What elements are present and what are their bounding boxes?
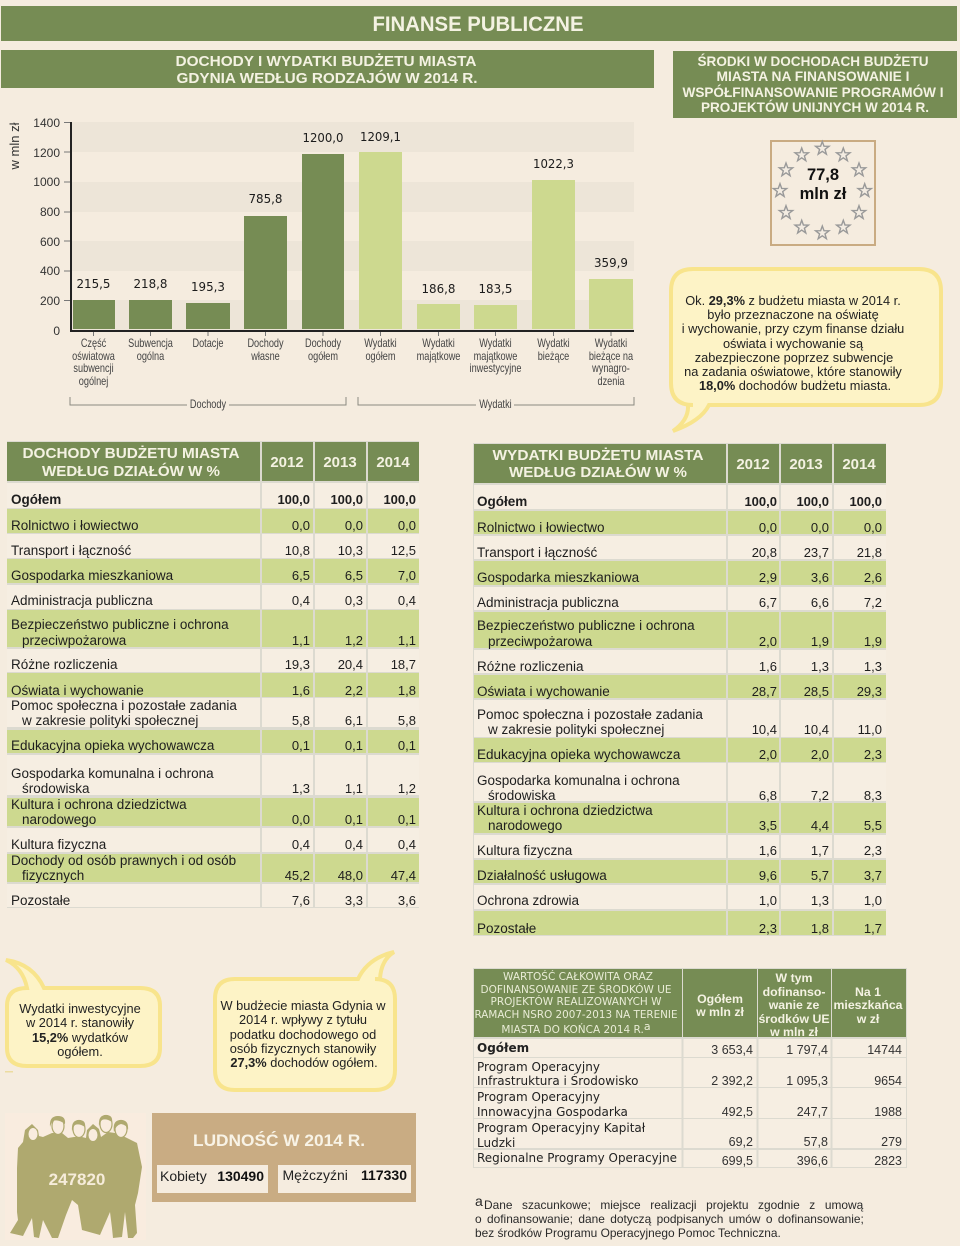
table values: 5,8 [292, 713, 310, 728]
table values: 23,7 [804, 545, 829, 560]
table labels [477, 494, 703, 936]
table labels: Program Operacyjny Kapitał [477, 1121, 646, 1135]
category labels: Subwencja [128, 338, 173, 350]
table labels: Bezpieczeństwo publiczne i ochrona [477, 618, 695, 633]
table header: W tym [776, 971, 813, 985]
table labels: Administracja publiczna [11, 593, 153, 608]
table header: mieszkańca [833, 998, 903, 1012]
table values [711, 1043, 902, 1168]
y axis labels: 800 [40, 205, 60, 219]
panel: population: LUDNOŚĆ W 2014 R. [193, 1131, 365, 1150]
category labels: Dochody [190, 399, 227, 411]
category labels: Wydatki [595, 338, 627, 350]
table values: 21,8 [857, 545, 882, 560]
table labels: przeciwpożarowa [22, 633, 127, 648]
table values: 6,6 [811, 595, 829, 610]
category labels: Wydatki [364, 338, 397, 350]
value labels: 359,9 [594, 255, 628, 270]
footnote: bez środków Programu Operacyjnego Pomoc Techniczna. [475, 1226, 781, 1240]
table labels: Kultura i ochrona dziedzictwa [477, 803, 653, 818]
table header: RAMACH NSRO 2007-2013 NA TERENIE [474, 1009, 678, 1021]
table values: 3,6 [811, 570, 829, 585]
category labels: Część [81, 338, 106, 350]
category labels: bieżące [538, 351, 569, 363]
table values: 6,8 [759, 788, 777, 803]
panel: population [152, 1113, 416, 1202]
value labels: 195,3 [191, 279, 225, 294]
callout: personal income tax: 27,3% dochodów ogółem. [230, 1055, 378, 1070]
table labels: Administracja publiczna [477, 595, 619, 610]
table values: 1,3 [864, 659, 882, 674]
table values: 1,6 [759, 843, 777, 858]
table values: 3,7 [864, 868, 882, 883]
table values: 100,0 [383, 492, 416, 507]
callout: personal income tax: osób fizycznych stanowiły [230, 1041, 377, 1056]
table values: 2,3 [864, 843, 882, 858]
table values: 10,8 [285, 543, 310, 558]
table values: 0,0 [292, 812, 310, 827]
footnote [475, 1193, 864, 1240]
table labels: Ogółem [11, 492, 61, 507]
table values: 0,0 [759, 520, 777, 535]
category labels: Wydatki [537, 338, 570, 350]
table values: 2 392,2 [711, 1074, 753, 1088]
bar chart: income and expenses [7, 116, 634, 411]
callout: education share [671, 269, 941, 431]
heading: budget income and expenses: GDYNIA WEDŁUG RODZAJÓW W 2014 R. [176, 69, 478, 87]
table values: 279 [881, 1135, 902, 1149]
table labels: Transport i łączność [477, 545, 598, 560]
men count [278, 1165, 411, 1193]
callout: investment expenses: w 2014 r. stanowiły [25, 1015, 135, 1030]
footnote: Dane szacunkowe; miejsce realizacji projektu zgodnie z umową [484, 1198, 864, 1212]
table header: w zł [856, 1012, 880, 1026]
value labels: 215,5 [76, 276, 110, 291]
table values: 69,2 [729, 1135, 753, 1149]
table header: wanie ze [768, 998, 819, 1012]
table header [474, 969, 906, 1039]
table values: 7,2 [864, 595, 882, 610]
heading: EU programmes: ŚRODKI W DOCHODACH BUDŻETU [698, 52, 928, 69]
table values: 10,3 [338, 543, 363, 558]
table header: 2012 [736, 456, 770, 473]
table values: 7,0 [398, 568, 416, 583]
men count: 117330 [361, 1167, 407, 1183]
table values: 10,4 [804, 722, 829, 737]
table values: 1,2 [398, 781, 416, 796]
table values: 11,0 [858, 722, 882, 737]
table header [7, 442, 419, 481]
table values: 9,6 [759, 868, 777, 883]
table values: 3,3 [345, 893, 363, 908]
table header: PROJEKTÓW REALIZOWANYCH W [490, 995, 662, 1008]
table values [277, 492, 416, 908]
table values: 0,0 [864, 520, 882, 535]
value labels: 1200,0 [302, 130, 344, 145]
table values: 1 095,3 [786, 1074, 828, 1088]
category labels: Wydatki [422, 338, 455, 350]
value labels [76, 129, 628, 296]
table values: 0,4 [398, 593, 416, 608]
table values: 396,6 [797, 1154, 828, 1168]
table header: Na 1 [855, 985, 881, 999]
light bars: expenses [359, 152, 633, 329]
table values: 1,8 [398, 683, 416, 698]
table values: 2,0 [759, 634, 777, 649]
table labels: Kultura i ochrona dziedzictwa [11, 797, 187, 812]
table values: 1 797,4 [786, 1043, 828, 1057]
table header: dofinanso- [763, 985, 825, 999]
table values: 1,9 [864, 634, 882, 649]
y axis labels: 1200 [33, 146, 60, 160]
table header [474, 444, 886, 483]
heading: EU programmes: MIASTA NA FINANSOWANIE I [716, 68, 910, 84]
table header: Ogółem [697, 992, 743, 1006]
table labels: środowiska [488, 788, 556, 803]
category labels: Dochody [247, 338, 284, 350]
table header: w mln zł [695, 1005, 744, 1019]
table values: 2,2 [345, 683, 363, 698]
table values: 2,0 [759, 747, 777, 762]
table labels: fizycznych [22, 868, 84, 883]
table labels: Gospodarka mieszkaniowa [11, 568, 174, 583]
value labels: 1022,3 [533, 156, 574, 171]
table values: 1,1 [398, 633, 416, 648]
table values: 6,5 [345, 568, 363, 583]
table labels: Ochrona zdrowia [477, 893, 580, 908]
table labels: Bezpieczeństwo publiczne i ochrona [11, 617, 229, 632]
table values: 100,0 [744, 494, 777, 509]
category labels: majątkowe [417, 351, 461, 363]
table values: 29,3 [857, 684, 882, 699]
category labels: majątkowe [474, 351, 518, 363]
table header: DOFINANSOWANIE ZE ŚRODKÓW UE [480, 983, 672, 996]
table labels: Kultura fizyczna [11, 837, 107, 852]
table values: 1,3 [811, 659, 829, 674]
category labels: dzenia [598, 376, 625, 388]
table values: 1988 [874, 1105, 902, 1119]
table header: 2013 [789, 456, 823, 473]
callout: investment expenses: ogółem. [57, 1044, 103, 1059]
EU stars box: 77,8 mln zł: mln zł [800, 185, 847, 203]
category labels: Wydatki [479, 399, 512, 411]
table labels: Różne rozliczenia [11, 657, 118, 672]
table values: 2,6 [864, 570, 882, 585]
table values: 9654 [874, 1074, 902, 1088]
table labels: Program Operacyjny [477, 1090, 600, 1104]
table values: 0,0 [345, 518, 363, 533]
table labels: narodowego [488, 818, 562, 833]
table header: MIASTA DO KOŃCA 2014 R. [501, 1024, 644, 1036]
table values: 0,1 [398, 738, 416, 753]
table values: 5,7 [811, 868, 829, 883]
table labels: Różne rozliczenia [477, 659, 584, 674]
y axis labels [33, 116, 60, 338]
table values: 18,7 [391, 657, 416, 672]
table values: 1,6 [292, 683, 310, 698]
y axis labels: 0 [53, 324, 60, 338]
table labels: środowiska [22, 781, 90, 796]
table values: 2,0 [811, 747, 829, 762]
table values: 19,3 [285, 657, 310, 672]
table labels: Gospodarka komunalna i ochrona [477, 773, 680, 788]
table labels: Ludzki [477, 1136, 515, 1150]
table values: 3,6 [398, 893, 416, 908]
y axis labels: 1000 [33, 175, 60, 189]
table values: 45,2 [285, 868, 310, 883]
table values: 0,0 [398, 518, 416, 533]
callout: personal income tax: podatku dochodowego od [230, 1027, 376, 1042]
table values: 0,4 [292, 593, 310, 608]
table labels: Pozostałe [11, 893, 70, 908]
table values: 1,8 [811, 921, 829, 936]
table values: 1,1 [292, 633, 310, 648]
value labels: 218,8 [134, 276, 168, 291]
table values: 5,8 [398, 713, 416, 728]
category labels: ogółem [308, 351, 338, 363]
table labels: Gospodarka mieszkaniowa [477, 570, 640, 585]
table: budget income by sector [7, 441, 419, 908]
table labels: Pomoc społeczna i pozostałe zadania [11, 698, 237, 713]
table labels: Rolnictwo i łowiectwo [11, 518, 139, 533]
category labels: inwestycyjne [470, 363, 522, 375]
table values: 1,3 [811, 893, 829, 908]
title banner: FINANSE PUBLICZNE [372, 13, 584, 36]
table values: 1,9 [811, 634, 829, 649]
title banner [1, 6, 957, 41]
value labels: 785,8 [248, 191, 283, 206]
table values: 7,6 [292, 893, 310, 908]
table labels: w zakresie polityki społecznej [487, 722, 664, 737]
table values: 7,2 [811, 788, 829, 803]
table values: 0,1 [345, 812, 363, 827]
table labels: Dochody od osób prawnych i od osób [11, 853, 236, 868]
category labels: ogółem [365, 351, 395, 363]
heading: budget income and expenses [1, 50, 654, 88]
table labels: Regionalne Programy Operacyjne [477, 1151, 677, 1165]
table values: 1,0 [864, 893, 882, 908]
table header: WARTOŚĆ CAŁKOWITA ORAZ [503, 970, 653, 983]
table values: 0,1 [398, 812, 416, 827]
category labels: oświatowa [72, 351, 115, 363]
heading: EU programmes: WSPÓŁFINANSOWANIE PROGRAMÓW I [682, 83, 944, 100]
table values: 100,0 [796, 494, 829, 509]
table values: 28,5 [804, 684, 829, 699]
table values: 0,1 [292, 738, 310, 753]
callout: education share: zabezpieczone poprzez subwencje [695, 350, 893, 365]
table values: 699,5 [722, 1154, 753, 1168]
table values: 4,4 [811, 818, 829, 833]
table values: 100,0 [330, 492, 363, 507]
table values: 1,7 [864, 921, 882, 936]
table values: 0,0 [292, 518, 310, 533]
table labels: Gospodarka komunalna i ochrona [11, 766, 214, 781]
callout: education share: na zadania oświatowe, które stanowiły [684, 364, 902, 379]
table values: 0,0 [811, 520, 829, 535]
EU stars box: 77,8 mln zł: 77,8 [807, 166, 839, 184]
dark bars: income [73, 154, 344, 329]
footnote: o dofinansowanie; dane dotyczą podpisanych umów o dofinansowanie; [475, 1212, 864, 1226]
EU stars box: 77,8 mln zł [771, 141, 875, 245]
table labels: Rolnictwo i łowiectwo [477, 520, 605, 535]
table values: 2823 [874, 1154, 902, 1168]
category labels: Dotacje [192, 338, 224, 350]
table: EU funded projects [473, 968, 907, 1168]
table labels [11, 492, 237, 908]
table values: 0,4 [398, 837, 416, 852]
callout: education share: było przeznaczone na oświatę [707, 307, 879, 322]
table values: 6,7 [759, 595, 777, 610]
y axis labels: 1400 [33, 116, 60, 130]
table values: 6,1 [345, 713, 363, 728]
table header: 2012 [270, 454, 304, 471]
table values: 0,1 [345, 738, 363, 753]
table values: 1,7 [811, 843, 829, 858]
callout: investment expenses: 15,2% wydatków [32, 1030, 129, 1045]
table labels: narodowego [22, 812, 96, 827]
y axis labels: 200 [40, 294, 60, 308]
table header: środków UE [758, 1012, 830, 1026]
icon: people silhouette with total population: 247820 [49, 1170, 105, 1189]
table values: 1,3 [292, 781, 310, 796]
callout: personal income tax: 2014 r. wpływy z tytułu [239, 1012, 367, 1027]
table labels: Transport i łączność [11, 543, 132, 558]
callout: education share: oświata i wychowanie są [723, 336, 864, 351]
category labels: ogólnej [79, 376, 108, 388]
table header: WYDATKI BUDŻETU MIASTA [492, 447, 704, 464]
table values: 20,8 [752, 545, 777, 560]
table labels: Pozostałe [477, 921, 536, 936]
value labels: 1209,1 [360, 129, 401, 144]
table values: 28,7 [752, 684, 777, 699]
table labels: Ogółem [477, 1041, 529, 1055]
table values: 6,5 [292, 568, 310, 583]
women count [157, 1165, 268, 1193]
category labels: Dochody [305, 338, 342, 350]
women count: 130490 [217, 1168, 264, 1184]
table labels: Pomoc społeczna i pozostałe zadania [477, 707, 703, 722]
table labels: Program Operacyjny [477, 1060, 600, 1074]
table labels: przeciwpożarowa [488, 634, 593, 649]
table labels: Edukacyjna opieka wychowawcza [477, 747, 681, 762]
table header: 2013 [323, 454, 357, 471]
table labels: Edukacyjna opieka wychowawcza [11, 738, 215, 753]
category labels: własne [250, 351, 280, 363]
table values: 492,5 [722, 1105, 753, 1119]
men count: Mężczyźni [282, 1167, 348, 1183]
callout: investment expenses: Wydatki inwestycyjne [19, 1001, 141, 1016]
table values: 100,0 [849, 494, 882, 509]
category labels: subwencji [73, 363, 114, 375]
table values: 2,9 [759, 570, 777, 585]
table values: 1,2 [345, 633, 363, 648]
callout: investment expenses [5, 960, 160, 1072]
table values: 2,3 [759, 921, 777, 936]
women count: Kobiety [160, 1168, 207, 1184]
table values: 0,4 [292, 837, 310, 852]
table labels: w zakresie polityki społecznej [21, 713, 198, 728]
callout: education share: i wychowanie, przy czym finanse działu [682, 321, 904, 336]
table values: 0,3 [345, 593, 363, 608]
table values: 47,4 [391, 868, 416, 883]
table values: 48,0 [338, 868, 363, 883]
table values: 12,5 [391, 543, 416, 558]
table values: 100,0 [277, 492, 310, 507]
table values: 247,7 [797, 1105, 828, 1119]
callout: personal income tax [215, 952, 395, 1090]
table values [744, 494, 882, 936]
table: budget expenses by sector [473, 443, 886, 936]
value labels: 183,5 [478, 281, 512, 296]
y axis unit label: w mln zł [7, 122, 22, 170]
table values: 3 653,4 [711, 1043, 753, 1057]
table labels: Kultura fizyczna [477, 843, 573, 858]
table values: 5,5 [864, 818, 882, 833]
table values: 0,4 [345, 837, 363, 852]
callout: education share: 18,0% dochodów budżetu miasta. [699, 378, 891, 393]
footnote: a [475, 1193, 483, 1209]
y axis labels: 400 [40, 264, 60, 278]
table labels: Działalność usługowa [477, 868, 607, 883]
callout: personal income tax: W budżecie miasta Gdynia w [220, 998, 386, 1013]
table header: w mln zł [769, 1025, 818, 1039]
table header: WEDŁUG DZIAŁÓW W % [509, 463, 687, 481]
table values: 57,8 [804, 1135, 828, 1149]
table header: DOCHODY BUDŻETU MIASTA [22, 445, 240, 462]
heading: EU programmes [673, 51, 957, 118]
table values: 2,3 [864, 747, 882, 762]
table values: 1,0 [759, 893, 777, 908]
table labels: Oświata i wychowanie [11, 683, 144, 698]
table labels: Ogółem [477, 494, 527, 509]
category labels: wynagro- [591, 363, 630, 375]
table values: 10,4 [752, 722, 777, 737]
table values: 1,1 [345, 781, 363, 796]
heading: budget income and expenses: DOCHODY I WYDATKI BUDŻETU MIASTA [176, 53, 477, 70]
table values: 1,6 [759, 659, 777, 674]
table values: 20,4 [338, 657, 363, 672]
table labels: Infrastruktura i Środowisko [477, 1073, 639, 1088]
callout: education share: Ok. 29,3% z budżetu miasta w 2014 r. [685, 293, 901, 308]
table labels: Innowacyjna Gospodarka [477, 1105, 628, 1119]
category labels: Wydatki [479, 338, 512, 350]
table values: 8,3 [864, 788, 882, 803]
table values: 14744 [867, 1043, 902, 1057]
table header: 2014 [842, 456, 876, 473]
table header: WEDŁUG DZIAŁÓW W % [42, 462, 220, 480]
category labels: ogólna [137, 351, 164, 363]
y axis labels: 600 [40, 235, 60, 249]
value labels: 186,8 [422, 281, 456, 296]
category labels: bieżące na [589, 351, 633, 363]
icon: people silhouette with total population [5, 1113, 146, 1240]
table header: a [644, 1020, 651, 1033]
table labels [477, 1041, 677, 1165]
category labels [72, 338, 633, 411]
table labels: Oświata i wychowanie [477, 684, 610, 699]
heading: EU programmes: PROJEKTÓW UNIJNYCH W 2014 R. [701, 98, 929, 115]
table values: 3,5 [759, 818, 777, 833]
table header: 2014 [376, 454, 410, 471]
